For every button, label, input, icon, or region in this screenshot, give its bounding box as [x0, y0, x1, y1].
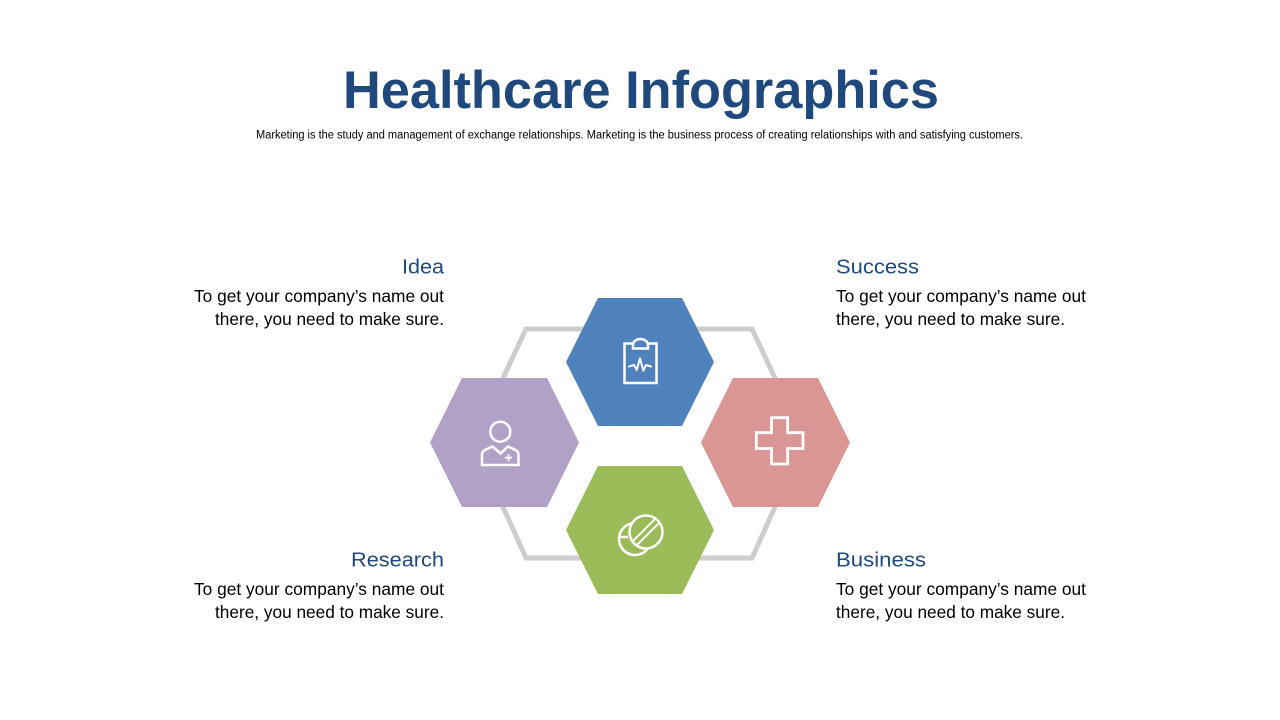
icon: medical staff person: [482, 422, 518, 465]
text block: success: Success: [836, 256, 919, 278]
panel: person hexagon: [430, 378, 579, 507]
text block: research: Research: [351, 550, 444, 572]
text block: success: To get your company’s name out: [836, 286, 1086, 306]
hexagon connector outline: [503, 329, 775, 558]
text block: idea: [194, 256, 445, 329]
icon: pills: [619, 516, 662, 555]
text block: business: To get your company’s name out: [836, 579, 1086, 599]
text block: idea: there, you need to make sure.: [215, 309, 444, 329]
icon: medical cross: [756, 418, 803, 464]
white mask: centre of connector sides: [498, 378, 780, 507]
panel: clipboard hexagon: [566, 298, 714, 426]
text block: business: Business: [836, 550, 926, 572]
subtitle: Marketing is the study and management of exchange relationships. Marketing is the business process of creating relationships with and satisfying customers.: [256, 130, 1023, 142]
text block: research: [194, 550, 444, 622]
text block: research: To get your company’s name out: [194, 579, 444, 599]
text block: idea: To get your company’s name out: [194, 286, 444, 306]
text block: success: there, you need to make sure.: [836, 309, 1065, 329]
title: Healthcare Infographics: [343, 61, 939, 120]
icon: clipboard with heartbeat: [624, 339, 656, 383]
text block: business: there, you need to make sure.: [836, 602, 1065, 622]
text block: business: [836, 550, 1086, 622]
panel: cross hexagon: [701, 378, 850, 507]
text block: success: [836, 256, 1086, 329]
text block: research: there, you need to make sure.: [215, 602, 444, 622]
panel: pill hexagon: [566, 466, 714, 594]
text block: idea: Idea: [402, 256, 445, 278]
